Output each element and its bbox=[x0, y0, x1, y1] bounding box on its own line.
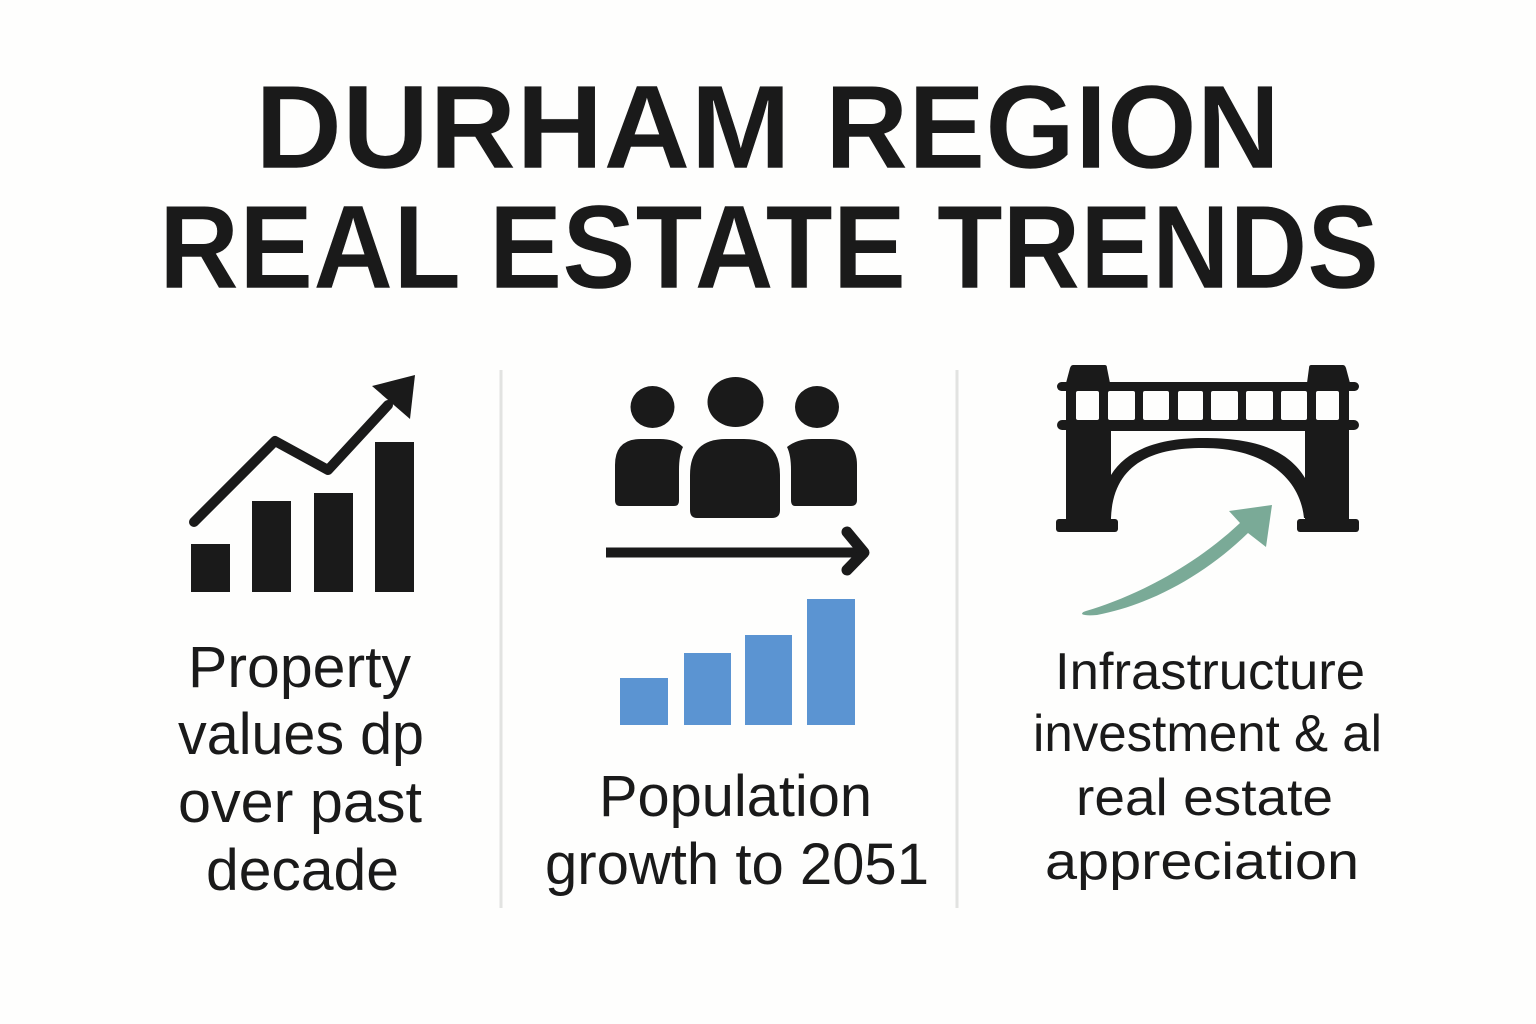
icon: population group bbox=[615, 377, 857, 518]
title: REGION bbox=[825, 61, 1280, 194]
text: property values: decade bbox=[206, 838, 399, 903]
text: property values: Property bbox=[188, 635, 411, 700]
icon: bridge bbox=[1056, 365, 1359, 532]
title: DURHAM bbox=[255, 61, 791, 194]
title: ESTATE bbox=[489, 181, 906, 314]
text: infrastructure investment: appreciation bbox=[1045, 833, 1359, 891]
text: property values: over past bbox=[178, 770, 422, 835]
title: REAL bbox=[159, 181, 461, 314]
arrow: appreciation bbox=[1082, 505, 1272, 615]
text: infrastructure investment: real estate bbox=[1076, 769, 1333, 827]
text: property values: values dp bbox=[178, 702, 424, 767]
text: infrastructure investment bbox=[1033, 643, 1382, 891]
text: property values bbox=[178, 635, 424, 903]
title: TRENDS bbox=[937, 181, 1379, 314]
arrow: population growth bbox=[606, 532, 864, 570]
icon: property value growth chart bbox=[191, 375, 415, 592]
text: infrastructure investment: Infrastructure bbox=[1055, 643, 1365, 701]
text: population growth: Population bbox=[599, 764, 872, 829]
text: population growth: growth to 2051 bbox=[545, 832, 929, 897]
text: population growth bbox=[545, 764, 929, 897]
title bbox=[159, 61, 1379, 314]
bar chart: population bbox=[620, 599, 855, 725]
text: infrastructure investment: investment & al bbox=[1033, 705, 1382, 763]
